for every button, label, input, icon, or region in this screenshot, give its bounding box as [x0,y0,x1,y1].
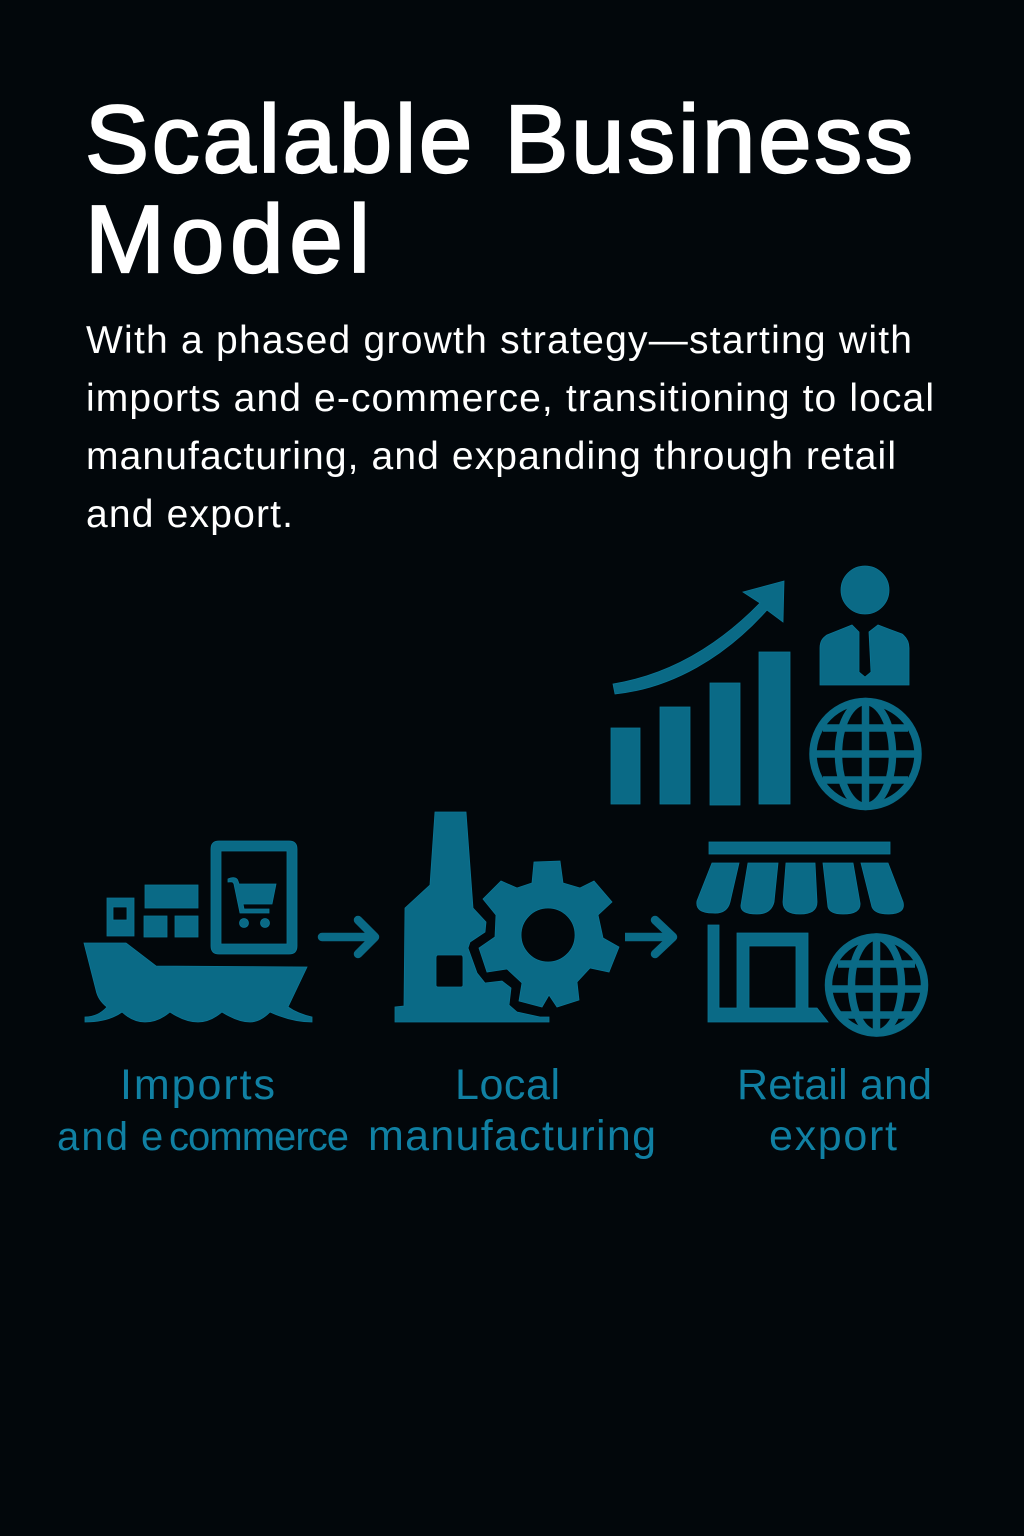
label: imports and e commerce: commerce [169,1115,349,1159]
icon: factory and gear [395,812,619,1022]
icon: growth bar chart with arrow [611,581,790,805]
icon: ship, containers and tablet cart [84,841,312,1022]
title [85,86,913,293]
awning bar [709,842,890,854]
label: retail and export [737,1061,932,1160]
intro text: manufacturing, and expanding through retail [86,435,896,478]
title: Model [85,186,370,293]
label: imports and e commerce: Imports [120,1061,275,1109]
intro text: and export. [86,493,293,536]
icon: business person [820,566,909,685]
label: imports and e commerce [57,1061,349,1159]
icon: storefront [697,842,903,1022]
arrow: manufacturing to retail [625,920,673,954]
gear [479,861,619,1007]
arrow: imports to manufacturing [322,920,375,954]
label: retail and export: Retail and [737,1061,932,1109]
icon: lower globe [828,937,924,1033]
intro text: With a phased growth strategy—starting with [86,319,912,362]
label: retail and export: export [769,1112,897,1160]
label: imports and e commerce: and [57,1115,128,1159]
ship hull [84,943,312,1022]
icon: upper globe [813,701,918,807]
label: local manufacturing: Local [455,1061,560,1109]
factory [395,812,549,1022]
shop wall and door [708,925,828,1022]
awning stripes [697,863,739,913]
shopping cart [228,878,276,913]
label: local manufacturing [368,1061,656,1160]
label: imports and e commerce: e [141,1115,163,1159]
containers [107,898,134,936]
tablet [211,841,297,954]
intro text [86,319,934,536]
intro text: imports and e-commerce, transitioning to local [86,377,934,420]
title: Scalable Business [85,86,913,193]
label: local manufacturing: manufacturing [368,1112,656,1160]
